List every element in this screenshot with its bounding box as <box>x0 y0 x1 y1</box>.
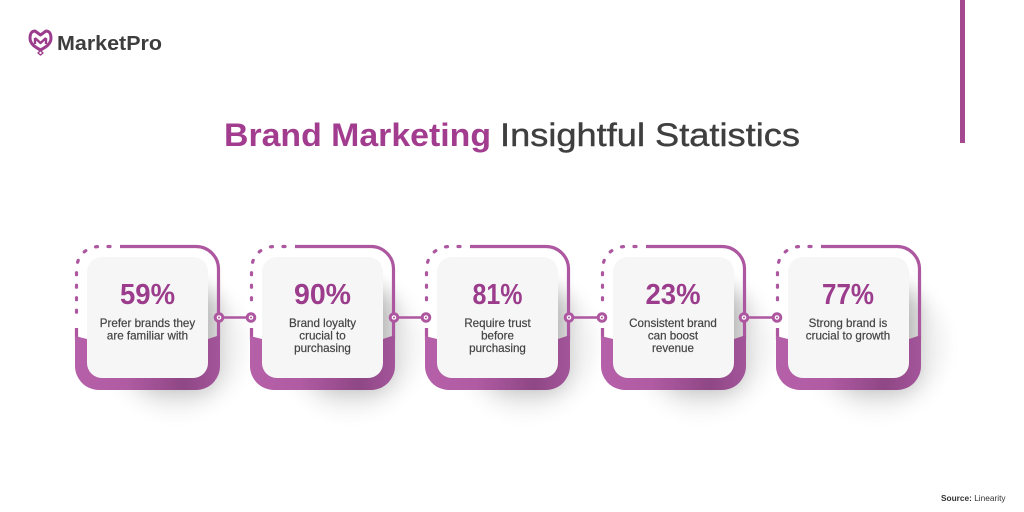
label: brand loyalty: Brand loyalty <box>289 317 356 330</box>
card 1 shadow <box>108 277 244 413</box>
connector: card 3 to 4 <box>565 314 606 321</box>
connector: card 4 to 5 <box>740 314 781 321</box>
title: Insightful Statistics <box>500 117 800 153</box>
label: require trust: purchasing <box>469 342 526 355</box>
panel: card 1 <box>75 246 220 390</box>
panel: card 4 <box>601 246 746 390</box>
source note: Source: Linearity <box>941 493 1006 503</box>
stat: 81%: 81% <box>472 279 523 311</box>
label: brand loyalty: purchasing <box>294 342 351 355</box>
label: prefer brands: are familiar with <box>107 330 188 342</box>
title: Brand Marketing <box>224 117 491 153</box>
stat: 59%: 59% <box>120 279 175 311</box>
panel: card 3 <box>425 246 570 390</box>
label: require trust: before <box>481 330 514 342</box>
label: consistent brand: revenue <box>652 342 694 355</box>
connector: card 1 to 2 <box>215 314 255 321</box>
logo wordmark: MarketPro <box>57 33 162 55</box>
label: prefer brands: Prefer brands they <box>100 317 195 330</box>
label: strong brand: Strong brand is <box>809 317 887 330</box>
label: require trust: Require trust <box>464 317 531 330</box>
title <box>224 117 800 153</box>
stat: 23%: 23% <box>646 279 701 311</box>
label: consistent brand: can boost <box>648 330 699 342</box>
logo <box>30 31 162 55</box>
icon: MarketPro logo mark <box>30 31 51 55</box>
stat: 90%: 90% <box>294 279 351 311</box>
connector: card 2 to 3 <box>390 314 430 321</box>
card 2 shadow <box>283 277 419 413</box>
card 4 shadow <box>634 277 770 413</box>
accent bar <box>960 0 965 143</box>
panel: card 2 <box>250 246 395 390</box>
label: consistent brand: Consistent brand <box>629 317 717 330</box>
panel: card 5 <box>776 246 921 390</box>
label: brand loyalty: crucial to <box>299 330 346 342</box>
card 5 shadow <box>809 277 945 413</box>
card 3 shadow <box>458 277 594 413</box>
label: strong brand: crucial to growth <box>806 330 890 342</box>
stat: 77%: 77% <box>822 279 874 311</box>
